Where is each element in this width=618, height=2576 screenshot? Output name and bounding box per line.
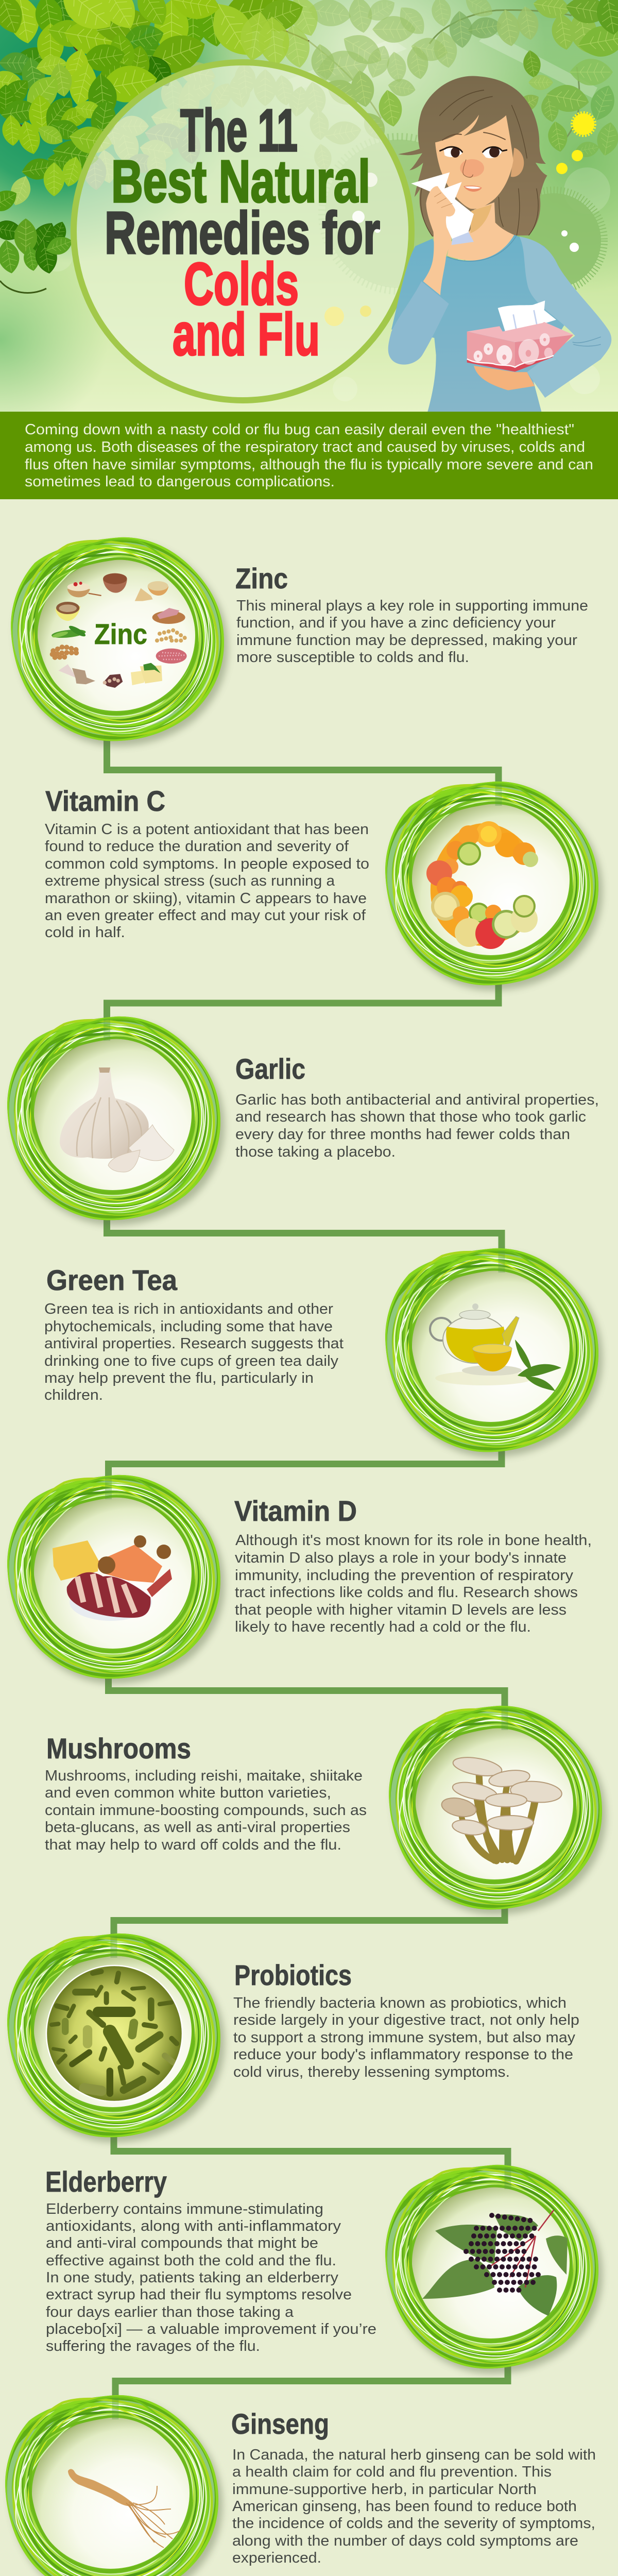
pollen dots [324,112,595,326]
body text: extreme physical stress (such as running a [45,873,335,889]
body text [236,598,588,666]
image: citrus letter C [426,821,538,949]
body text: along with the number of days cold symptoms are [232,2533,578,2549]
image: probiotic bacteria [47,1966,182,2101]
body text: found to reduce the duration and severity of [45,838,349,855]
body text: reside largely in your digestive tract, not only help [233,2012,579,2028]
image: ginseng root [68,2469,180,2548]
panel: Probiotics [0,1907,579,2163]
body text: placebo[xi] — a valuable improvement if you’re [46,2321,376,2337]
panel: Vitamin D [0,1449,592,1705]
body text: more susceptible to colds and flu. [236,649,469,666]
heading: Zinc [235,562,288,595]
woman with tissue box [388,76,611,412]
image: vitamin D foods [53,1535,172,1621]
heading: Probiotics [234,1959,352,1991]
panel: Garlic [0,990,599,1246]
body text [46,2201,376,2354]
body text: those taking a placebo. [235,1144,396,1160]
body text: beta-glucans, as well as anti-viral properties [45,1819,350,1836]
body text: tract infections like colds and flu. Research shows [235,1584,578,1601]
image: elderberries [422,2210,568,2316]
body text: immunity, including the prevention of respiratory [235,1567,574,1584]
body text: to support a strong immune system, but also may [233,2029,576,2046]
body text [233,1995,579,2080]
header illustration [0,0,618,438]
panel: Vitamin C [45,755,618,1011]
panel: Zinc [0,511,588,767]
leaves: bright top-left cluster [0,0,308,275]
body text: children. [44,1387,103,1403]
image rim [46,1965,182,2102]
body text: effective against both the cold and the flu. [46,2252,336,2269]
body text: and research has shown that those who took garlic [235,1109,586,1125]
image: teapot and cup [430,1303,561,1391]
body text: antiviral properties. Research suggests that [44,1335,344,1352]
leaves: pale leaves behind the title circle and top right [82,0,618,200]
body text: cold virus, thereby lessening symptoms. [233,2064,510,2080]
body text: reduce your body's inflammatory response to the [233,2046,573,2063]
title circle [74,62,411,400]
heading: Green Tea [46,1264,178,1296]
body text [235,1092,599,1160]
title: Remedies for [105,199,380,266]
body text: suffering the ravages of the flu. [46,2338,260,2354]
intro band: among us. Both diseases of the respiratory tract and caused by viruses, colds and [25,439,585,455]
body text: extract syrup had their flu symptoms resolve [46,2286,352,2303]
body text: Vitamin C is a potent antioxidant that has been [45,821,369,838]
body text: and even common white button varieties, [45,1785,331,1801]
body text: Green tea is rich in antioxidants and other [44,1301,334,1317]
body text: an even greater effect and may cut your risk of [45,907,366,924]
body text: contain immune-boosting compounds, such as [45,1802,367,1819]
body text: cold in half. [45,924,125,941]
intro band: flus often have similar symptoms, although the flu is typically more severe and can [25,456,593,473]
title: Colds [184,250,299,317]
body text: Garlic has both antibacterial and antiviral properties, [235,1092,599,1108]
panel: Ginseng [0,2369,596,2576]
body text: that may help to ward off colds and the flu. [45,1837,341,1853]
intro band [0,412,618,499]
panel: Green Tea [44,1222,618,1478]
body text: drinking one to five cups of green tea daily [44,1353,339,1369]
title: and Flu [173,301,320,368]
body text: experienced. [232,2550,321,2566]
panel: Mushrooms [45,1680,618,1936]
heading: Mushrooms [46,1732,191,1765]
branches [0,5,579,293]
body text: In Canada, the natural herb ginseng can be sold with [232,2447,596,2463]
body text: American ginseng, has been found to reduce both [232,2498,577,2515]
body text: vitamin D also plays a role in your body's innate [235,1550,566,1566]
body text: a health claim for cold and flu prevention. This [232,2464,552,2480]
heading: Vitamin C [45,785,165,817]
body text: the incidence of colds and the severity of symptoms, [232,2515,595,2532]
body text: immune function may be depressed, making your [236,632,578,649]
body text: marathon or skiing), vitamin C appears to have [45,890,367,907]
image: zinc foods [51,573,187,688]
image: garlic [60,1067,174,1172]
heading: Vitamin D [234,1495,357,1527]
body text: In one study, patients taking an elderberry [46,2269,339,2286]
body text: and anti-viral compounds that might be [46,2235,318,2251]
spiky background virus shapes [322,137,604,291]
image: mushrooms [440,1754,563,1861]
body text [232,2447,596,2566]
heading: Ginseng [231,2408,329,2440]
body text [45,821,369,941]
title [105,97,380,368]
body text: likely to have recently had a cold or the flu. [235,1619,531,1635]
body text: every day for three months had fewer colds than [235,1126,570,1143]
body text: The friendly bacteria known as probiotics, which [233,1995,566,2011]
body text [45,1768,367,1853]
body text: common cold symptoms. In people exposed to [45,856,369,872]
body text [44,1301,344,1403]
zinc label in image: Zinc [94,618,147,650]
body text: phytochemicals, including some that have [44,1318,333,1335]
intro band: Coming down with a nasty cold or flu bug can easily derail even the "healthiest" [25,421,574,438]
body text: This mineral plays a key role in supporting immune [236,598,588,614]
body text [235,1532,592,1635]
body text: function, and if you have a zinc deficiency your [236,615,556,631]
body text: antioxidants, along with anti-inflammatory [46,2218,341,2234]
heading: Garlic [235,1053,305,1085]
body text: Mushrooms, including reishi, maitake, shiitake [45,1768,363,1784]
intro band: sometimes lead to dangerous complications. [25,473,335,490]
body text: that people with higher vitamin D levels are less [235,1602,566,1618]
heading: Elderberry [45,2165,167,2198]
title: Best Natural [111,148,370,215]
body text: may help prevent the flu, particularly in [44,1370,314,1386]
title: The 11 [180,97,298,164]
body text: immune-supportive herb, in particular North [232,2481,537,2498]
body text: four days earlier than those taking a [46,2304,294,2320]
body text: Elderberry contains immune-stimulating [46,2201,323,2217]
body text: Although it's most known for its role in bone health, [235,1532,592,1549]
panel: Elderberry [45,2139,618,2395]
connectors between remedies [107,737,508,2576]
